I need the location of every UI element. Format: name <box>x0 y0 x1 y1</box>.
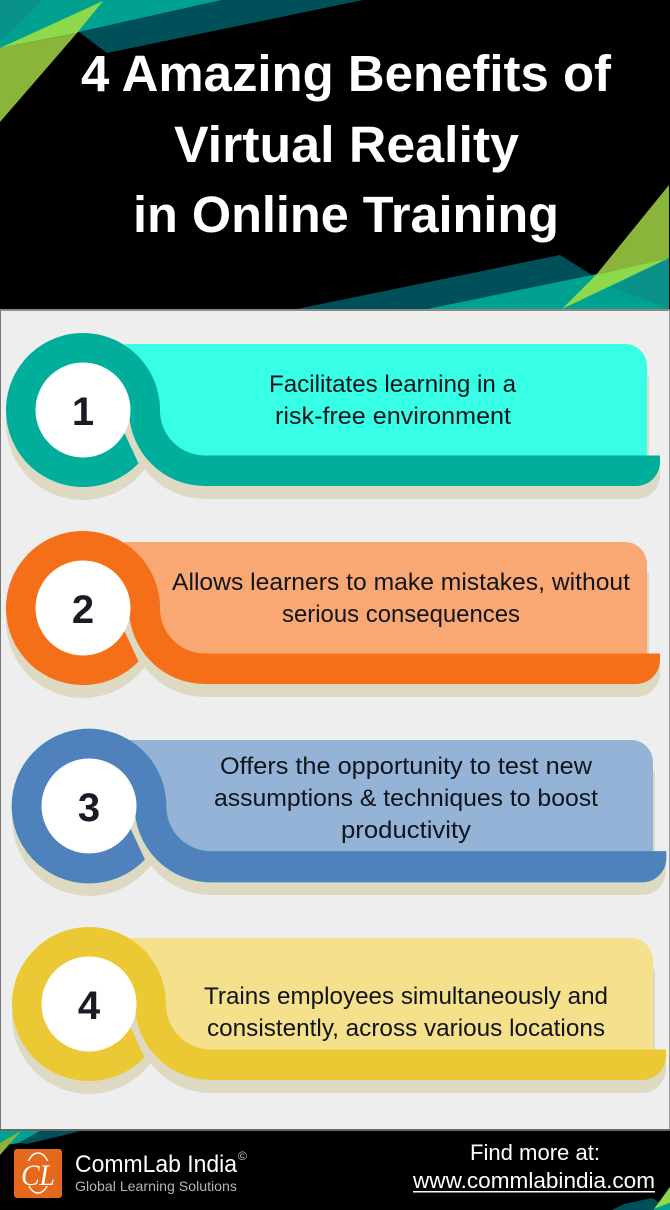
shadow <box>12 742 666 896</box>
title: 4 Amazing Benefits of <box>81 45 612 102</box>
title: Virtual Reality <box>174 116 520 173</box>
text <box>172 569 630 628</box>
text: risk-free environment <box>275 403 511 430</box>
logo <box>14 1149 62 1198</box>
text card <box>130 740 653 852</box>
text card <box>124 344 647 456</box>
number ring <box>12 927 166 1081</box>
panel: benefit 1 <box>6 333 660 500</box>
text card <box>130 938 653 1050</box>
footer <box>0 1129 670 1210</box>
decoration: top-left facets <box>0 0 363 122</box>
white number disc <box>42 758 136 854</box>
text: productivity <box>341 817 472 844</box>
text <box>269 371 516 430</box>
decoration: footer top-left facets <box>0 1131 81 1155</box>
shadow <box>12 940 666 1094</box>
text: Offers the opportunity to test new <box>220 753 592 780</box>
ribbon <box>135 1004 666 1080</box>
find more link: www.commlabindia.com <box>412 1168 655 1193</box>
white number disc <box>36 560 130 656</box>
ribbon <box>129 608 660 684</box>
white number disc <box>36 362 130 458</box>
ribbon <box>135 806 666 882</box>
brand name: © <box>238 1149 247 1163</box>
panel: benefit 4 <box>12 927 666 1094</box>
decoration: bottom-right facets <box>297 185 669 309</box>
title: in Online Training <box>133 186 559 243</box>
text: assumptions & techniques to boost <box>214 785 598 812</box>
text card <box>124 542 647 654</box>
find more link: Find more at: <box>470 1140 600 1165</box>
text: Facilitates learning in a <box>269 371 516 398</box>
white number disc <box>42 956 136 1052</box>
title <box>81 45 612 243</box>
number ring <box>12 729 166 883</box>
text <box>214 753 598 844</box>
find more link <box>412 1140 655 1193</box>
brand name <box>75 1149 247 1194</box>
number ring <box>6 531 160 685</box>
shadow <box>6 544 660 698</box>
text: consistently, across various locations <box>207 1015 605 1042</box>
text: Trains employees simultaneously and <box>204 983 608 1010</box>
panel: benefit 2 <box>6 531 660 698</box>
number: 4 <box>78 984 101 1028</box>
brand name: CommLab India <box>75 1151 238 1178</box>
brand name: Global Learning Solutions <box>75 1178 237 1194</box>
shadow <box>6 346 660 500</box>
number: 3 <box>78 786 100 830</box>
header banner <box>0 0 670 311</box>
decoration: footer bottom-right facets <box>612 1187 670 1210</box>
logo: CL <box>21 1159 55 1192</box>
number: 2 <box>72 588 94 632</box>
text: Allows learners to make mistakes, without <box>172 569 630 596</box>
text: serious consequences <box>282 601 520 628</box>
number: 1 <box>72 390 94 434</box>
ribbon <box>129 410 660 486</box>
panel: benefit 3 <box>12 729 666 896</box>
number ring <box>6 333 160 487</box>
text <box>204 983 608 1042</box>
